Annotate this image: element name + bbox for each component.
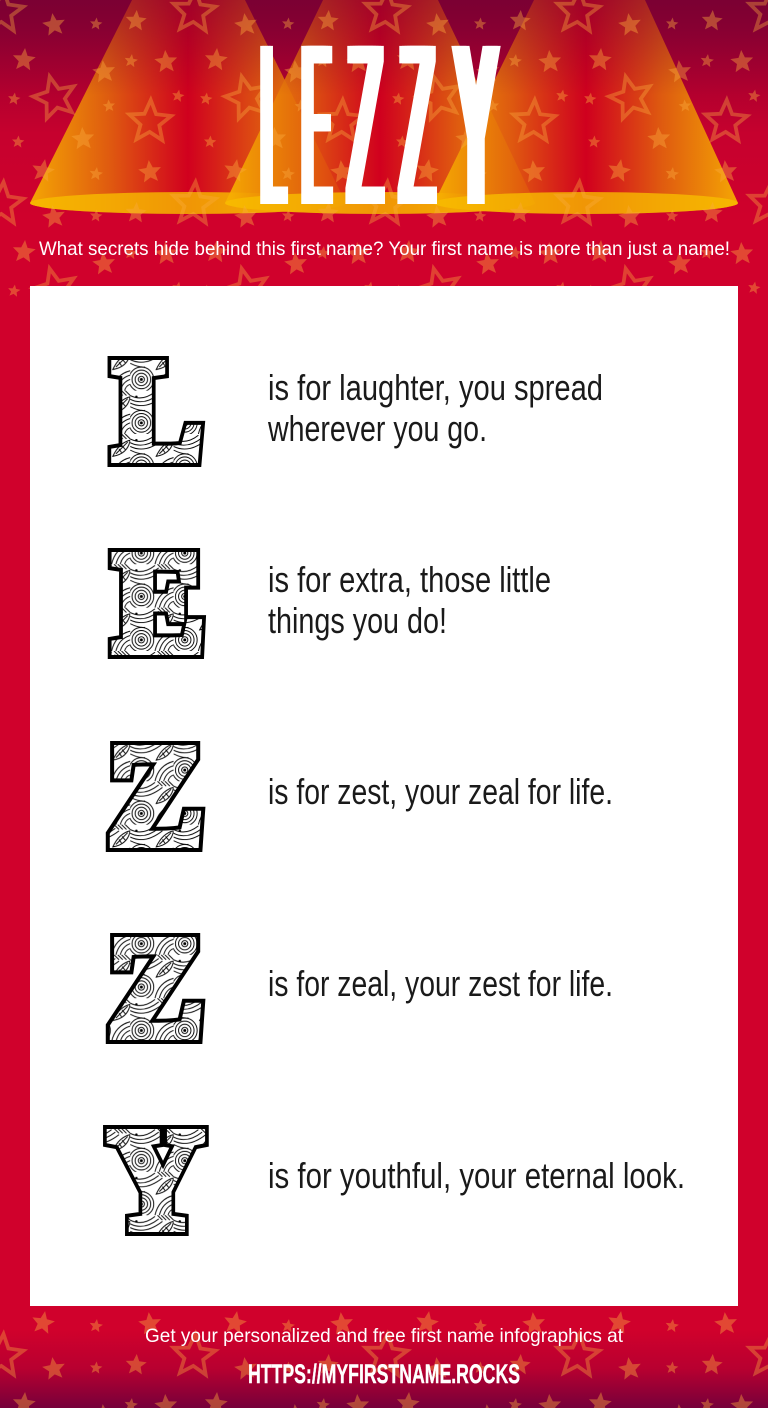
title: Z	[401, 0, 433, 254]
star pattern: top	[0, 0, 768, 300]
row: L	[114, 331, 603, 489]
title: Z	[349, 0, 381, 254]
icon: patterned letter L: L	[114, 331, 202, 489]
text: L line: is for laughter, you spread	[268, 367, 603, 408]
title	[260, 0, 501, 254]
text: E line: is for extra, those little	[268, 559, 551, 600]
text: Z line: is for zest, your zeal for life.	[268, 771, 613, 812]
title: L	[261, 0, 285, 254]
spotlights	[30, 0, 738, 214]
title: E	[302, 0, 330, 254]
row: Y	[109, 1100, 685, 1258]
title: Y	[456, 0, 496, 254]
icon: patterned letter E: E	[114, 523, 204, 681]
icon: patterned letter Z: Z	[108, 908, 203, 1066]
text: second Z line: is for zeal, your zest for life.	[268, 963, 613, 1004]
panel: white content card	[30, 286, 738, 1306]
icon: patterned letter Y: Y	[109, 1100, 203, 1258]
row: E	[114, 523, 551, 681]
footer url: HTTPS://MYFIRSTNAME.ROCKS	[248, 1359, 520, 1389]
row: Z	[108, 716, 613, 874]
text: Y line: is for youthful, your eternal look.	[268, 1155, 685, 1196]
footer text: Get your personalized and free first name infographics at	[145, 1325, 624, 1347]
subtitle: What secrets hide behind this first name? Your first name is more than just a name!	[39, 238, 730, 260]
spotlight: left	[30, 0, 346, 214]
row: Z second	[108, 908, 613, 1066]
icon: patterned letter Z: Z	[108, 716, 203, 874]
text: L line: wherever you go.	[267, 408, 487, 449]
text: E line: things you do!	[268, 600, 447, 641]
star pattern: bottom	[0, 1306, 768, 1408]
spotlight: right	[434, 0, 738, 214]
spotlight: middle	[225, 0, 535, 214]
